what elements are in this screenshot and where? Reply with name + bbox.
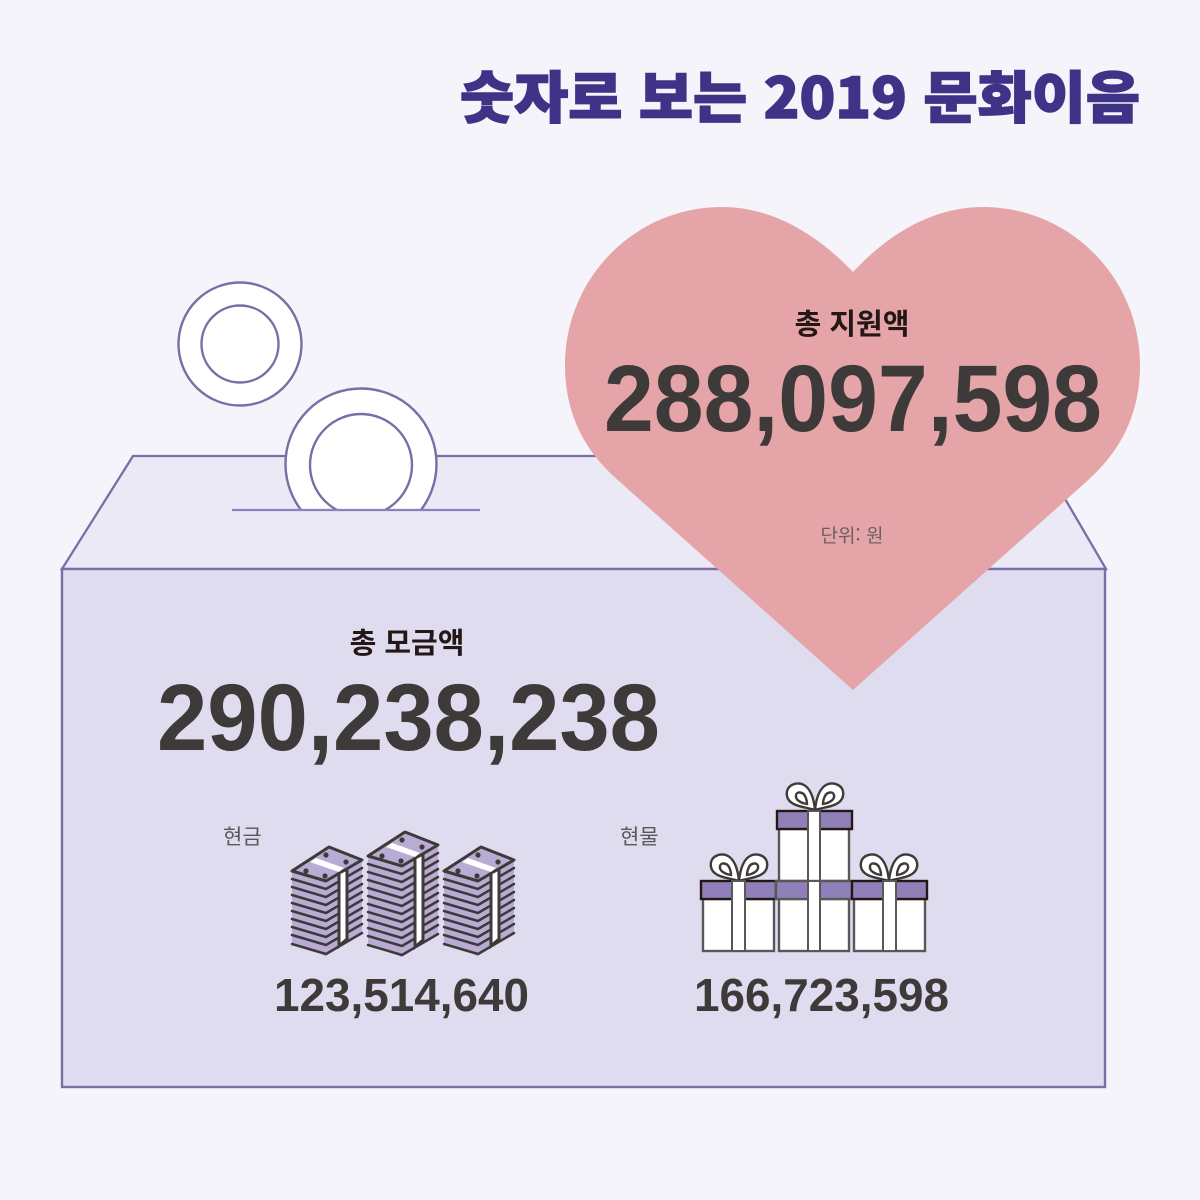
total support label: 총 지원액 (795, 301, 909, 343)
icon: cash stacks (292, 832, 514, 957)
gift top (777, 783, 852, 881)
icon: gift boxes (701, 783, 927, 951)
in-kind label: 현물 (620, 821, 659, 851)
unit note: 단위: 원 (820, 521, 884, 548)
coin slot (232, 509, 480, 511)
cash stack 2 (368, 832, 438, 957)
large coin entering the slot (284, 387, 438, 509)
total support amount: 288,097,598 (604, 346, 1102, 452)
small coin (178, 282, 302, 406)
cash label: 현금 (223, 821, 262, 851)
gift right (852, 854, 927, 951)
donation box lid (62, 456, 1106, 569)
donation box front (62, 569, 1105, 1087)
in-kind amount: 166,723,598 (694, 969, 949, 1021)
gift middle (776, 881, 852, 951)
cash stack 1 (292, 847, 362, 956)
cash amount: 123,514,640 (274, 969, 529, 1021)
total raised label: 총 모금액 (350, 620, 464, 662)
heart (565, 207, 1140, 690)
cash stack 3 (444, 847, 514, 956)
total raised amount: 290,238,238 (157, 665, 660, 771)
gift left (701, 854, 776, 951)
title: 숫자로 보는 2019 문화이음 (460, 54, 1140, 135)
